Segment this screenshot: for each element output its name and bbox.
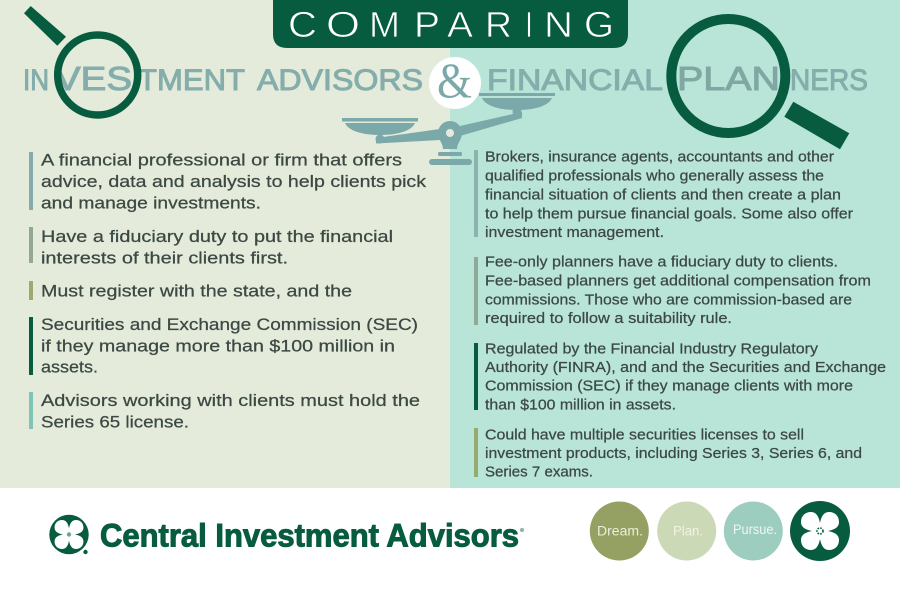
heading: financial planners: PLAN — [677, 60, 780, 97]
text block: planner licenses: Series 7 exams. — [485, 464, 593, 481]
badge: Plan: Plan. — [673, 522, 703, 538]
badge: Pursue — [724, 502, 783, 560]
title banner: I — [525, 4, 533, 45]
title banner: C — [288, 4, 317, 45]
icon: logo flower — [49, 515, 89, 554]
title banner: R — [485, 4, 512, 45]
icon: right magnifying glass — [671, 19, 849, 149]
text block: advisor definition: and manage investments. — [41, 193, 261, 212]
heading: financial planners — [487, 60, 868, 97]
heading: financial planners: FINANCIAL — [487, 64, 663, 97]
title banner: N — [544, 4, 573, 45]
ampersand badge: & — [437, 52, 472, 108]
text block: planner regulation — [474, 340, 886, 413]
left column: advisor facts — [29, 150, 427, 431]
badge: Dream — [590, 502, 649, 560]
text block: planner licenses: Could have multiple securities licenses to sell — [485, 426, 804, 443]
text block: advisor SEC threshold: Securities and Exchange Commission (SEC) — [41, 315, 418, 334]
icon: left magnifying glass — [24, 6, 138, 115]
text block: planner fees: required to follow a suitability rule. — [485, 310, 732, 327]
text block: planner definition — [474, 149, 853, 241]
text block: advisor fiduciary duty: Have a fiduciary duty to put the financial — [41, 227, 393, 246]
heading: investment advisors: VES — [55, 60, 132, 97]
text block: advisor SEC threshold — [29, 315, 418, 377]
title banner: A — [447, 4, 473, 45]
icon: balance scale — [342, 93, 555, 165]
text block: planner definition: to help them pursue financial goals. Some also offer — [485, 205, 853, 222]
text block: advisor definition — [29, 150, 427, 212]
heading: investment advisors: ADVISORS — [257, 64, 423, 97]
tagline badges — [590, 501, 850, 561]
text block: planner fees — [474, 254, 871, 327]
text block: planner fees: commissions. Those who are commission-based are — [485, 291, 852, 308]
text block: planner licenses: investment products, including Series 3, Series 6, and — [485, 445, 862, 462]
panel: left background — [0, 0, 450, 488]
title banner: M — [369, 4, 400, 45]
registered mark — [520, 528, 524, 532]
logo: Central Investment Advisors — [49, 515, 524, 554]
heading: investment advisors: IN — [23, 64, 49, 97]
logo wordmark: Central Investment Advisors — [100, 518, 519, 554]
text block: advisor fiduciary duty: interests of their clients first. — [41, 248, 288, 267]
title banner: O — [326, 4, 360, 45]
badge: Dream: Dream. — [597, 523, 643, 539]
text block: advisor license: Advisors working with clients must hold the — [41, 391, 420, 410]
heading: investment advisors: TMENT — [138, 64, 245, 97]
text block: planner definition: financial situation of clients and then create a plan — [485, 186, 841, 203]
panel: footer background — [0, 488, 900, 600]
text block: planner definition: qualified professionals who generally assess the — [485, 168, 824, 185]
text block: planner fees: Fee-only planners have a fiduciary duty to clients. — [485, 254, 838, 271]
text block: planner definition: investment management. — [485, 224, 664, 241]
text block: advisor SEC threshold: if they manage more than $100 million in — [41, 337, 395, 356]
text block: advisor SEC threshold: assets. — [41, 358, 98, 377]
text block: advisor license — [29, 391, 420, 431]
badge: Pursue: Pursue. — [733, 521, 777, 537]
heading: investment advisors — [23, 60, 423, 97]
text block: planner definition: Brokers, insurance agents, accountants and other — [485, 149, 834, 166]
right column: planner facts — [474, 149, 886, 481]
panel: right background — [450, 0, 900, 488]
text block: advisor definition: advice, data and analysis to help clients pick — [41, 172, 427, 191]
text block: planner regulation: Authority (FINRA), and and the Securities and Exchange — [485, 359, 886, 376]
badge: dogwood flower — [790, 501, 850, 561]
text block: planner fees: Fee-based planners get additional compensation from — [485, 272, 871, 289]
text block: planner licenses — [474, 426, 862, 481]
text block: planner regulation: Commission (SEC) if they manage clients with more — [485, 378, 853, 395]
title banner — [273, 0, 628, 48]
title banner: P — [414, 4, 440, 45]
text block: planner regulation: Regulated by the Financial Industry Regulatory — [485, 340, 819, 357]
text block: advisor definition: A financial professional or firm that offers — [41, 150, 402, 170]
text block: advisor license: Series 65 license. — [41, 412, 189, 431]
text block: planner regulation: than $100 million in assets. — [485, 396, 676, 413]
text block: advisor registration: Must register with the state, and the — [41, 282, 352, 300]
heading: financial planners: NERS — [790, 64, 868, 97]
text block: advisor fiduciary duty — [29, 227, 393, 267]
badge: Plan — [657, 502, 716, 560]
title banner: G — [584, 4, 614, 45]
